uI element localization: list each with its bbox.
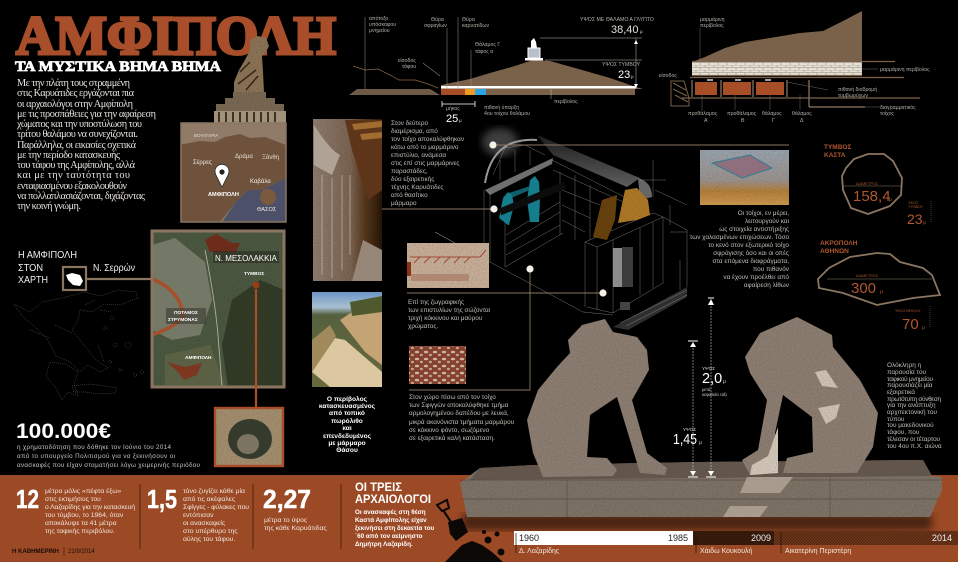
floor text: των Σφιγγών αποκαλύφθηκε τμήμα	[409, 401, 509, 409]
text: sphinx commentary: του 4ου π.Χ. αιώνα	[887, 442, 942, 450]
mosaic text: στα επόμενα διαφράγματα,	[713, 257, 789, 265]
tomb longitudinal section diagram	[659, 11, 930, 124]
section labels: τάφος α	[475, 48, 493, 55]
caryatids text: δύο εξαιρετικής	[391, 175, 434, 183]
section labels: μαρμάρινη περίβολος	[880, 66, 930, 73]
intro text: Παράλληλα, οι εικασίες σχετικά	[17, 140, 137, 151]
locator label: ΣΤΟΝ	[18, 263, 43, 274]
section labels: Θύρα	[462, 17, 475, 23]
stat: 1,5 tons: οι ανασκαφείς	[183, 519, 226, 527]
section labels: Β	[741, 118, 745, 124]
comparison: Kasta tumulus: ΔΙΑΜΕΤΡΟΣ	[856, 182, 879, 186]
comparison: Kasta tumulus: 23	[907, 211, 923, 227]
stat: 1,5 tons: 1,5	[147, 484, 177, 514]
bottom band	[0, 475, 958, 562]
caryatids text: κάτω από το μαρμάρινο	[391, 143, 459, 151]
height marker: sphinx: μ	[699, 440, 702, 446]
text: sphinx commentary: πρωτότυπη σύνθεση	[887, 395, 941, 403]
satellite labels: ΑΜΦΙΠΟΛΗ	[185, 355, 212, 361]
section labels: Α	[704, 118, 708, 124]
satellite labels: ΣΤΡΥΜΟΝΑΣ	[168, 317, 198, 323]
section labels	[369, 15, 654, 125]
stat: 2,27 metres: 2,27	[263, 484, 311, 514]
locator label: Η ΑΜΦΙΠΟΛΗ	[18, 250, 77, 261]
stat: 100.000 euro: η χρηματοδότηση που δόθηκε τον Ιούνιο του 2014	[17, 443, 171, 451]
caryatids text: επιστύλιο, ανάμεσα	[391, 151, 446, 159]
height marker: sphinx: 2,0	[702, 371, 722, 387]
comparison: Acropolis: 300	[851, 280, 876, 297]
enclosure caption: και	[342, 425, 352, 432]
intro text: στις Καρυάτιδες εργάζονται πια	[17, 88, 135, 99]
stat: 100.000 euro: ανασκαφές που είχαν σταματήσει λόγω χειμερινής περιόδου	[17, 461, 201, 469]
caryatids text: Στον δεύτερο	[391, 119, 429, 127]
intro text: με τις προσπάθειες για την αφαίρεση	[17, 109, 156, 120]
section labels: τάφου	[402, 63, 416, 70]
comparison: Kasta tumulus: ΥΨΟΣ	[908, 201, 919, 205]
fresco text	[408, 298, 491, 330]
stat: 2,27 metres	[263, 484, 327, 532]
intro text: και με την ταυτότητα του	[17, 170, 130, 181]
timeline: 1985	[668, 533, 688, 543]
text: sphinx commentary: του μακεδονικού	[887, 421, 934, 429]
heading: the three archaeologists: Δημήτρη Λαζαρίδη.	[355, 541, 413, 548]
caryatids text: τον τοίχο αποκαλύφθηκαν	[391, 135, 464, 143]
floor text: σε εξαιρετικά καλή κατάσταση.	[409, 434, 495, 442]
comparison: Kasta tumulus: ΤΥΜΒΟΣ	[824, 144, 851, 151]
photo: floor detail	[409, 346, 466, 384]
stat: 12 metres: μέτρα μόλις «πέφτα έξω»	[45, 487, 122, 495]
section labels: μ	[459, 118, 462, 123]
floor text	[409, 393, 515, 442]
enclosure caption: Ο περίβολος	[327, 395, 368, 403]
mosaic text: λειτουργούν και	[745, 217, 790, 225]
floor text: σε κόκκινο φόντο, σωζόμενο	[409, 426, 490, 434]
section labels: προθάλαμος	[688, 110, 718, 117]
stat: 2,27 metres: της κάθε Καρυάτιδας	[264, 524, 327, 532]
section labels: καρυατίδων	[462, 23, 489, 29]
floor text: Στον χώρο πίσω από τον τοίχο	[409, 393, 496, 401]
height marker: sphinx	[673, 298, 727, 477]
tomb wireframe reconstruction	[482, 128, 687, 330]
caryatids text: στις επί στις μαρμάρινες	[391, 159, 460, 167]
section labels: πιθανή διαδρομή	[838, 86, 877, 93]
text: sphinx commentary: παρουσιάζει μία	[887, 381, 933, 389]
leader lines	[365, 17, 471, 89]
section labels: Δ	[800, 118, 804, 124]
section labels: υπόσκαφου	[369, 21, 396, 28]
section labels: τυμβωρύχων	[838, 93, 868, 99]
comparison: Acropolis: ΑΚΡΟΠΟΛΗ	[820, 240, 858, 247]
photo: tomb aerial view	[215, 289, 283, 466]
heading: the three archaeologists: Καστά Αμφίπολης είχαν	[355, 516, 427, 524]
section labels: σφραγίων	[424, 23, 447, 29]
map: location of Amphipolis	[181, 123, 286, 222]
comparison: Kasta tumulus: μ	[889, 197, 892, 203]
mosaic text: αφαίρεση λίθων	[744, 281, 789, 289]
comparison: Kasta tumulus: ΚΑΣΤΑ	[824, 152, 846, 159]
sphinx base	[460, 460, 942, 530]
comparison: Kasta tumulus	[824, 144, 931, 227]
photo: Caryatid	[313, 119, 382, 281]
stat: 12 metres	[16, 484, 135, 535]
stat: 12 metres: ο Λαζαρίδης για την κατασκευή	[45, 503, 135, 511]
intro text: χώματος και την υποστύλωση του	[16, 119, 142, 130]
stat: 12 metres: της ταφικής περιβόλου.	[45, 527, 115, 535]
section labels: τοίχος	[880, 111, 894, 117]
section labels	[659, 16, 930, 124]
footer credit: 22/9/2014	[68, 549, 95, 555]
text: sphinx commentary: ταφικού μνημείου	[887, 375, 934, 383]
comparison: Acropolis: ΔΙΑΜΕΤΡΟΣ	[856, 274, 879, 278]
mosaic text: των χαλασμένων επιχώσεων. Τόσο	[690, 233, 789, 241]
text: sphinx commentary: για την ανάπτυξη	[887, 401, 936, 409]
stat: 1,5 tons: εντόπισαν	[183, 511, 214, 519]
intro text: τρίτου θαλάμου να συνεχίζονται.	[17, 129, 138, 140]
timeline: 1960	[519, 533, 539, 543]
map labels: Καβάλα	[250, 178, 271, 185]
locator label: ΧΑΡΤΗ	[18, 275, 48, 286]
floor text: μικρά ακανόνιστα τμήματα μαρμάρου	[409, 418, 515, 426]
height marker: sphinx: μ	[723, 379, 726, 385]
map labels: Δράμα	[235, 153, 253, 160]
timeline: Δ. Λαζαρίδης	[519, 547, 560, 555]
mosaic text: να έχουν προέλθει από	[723, 273, 789, 281]
section labels: μαρμάρινη	[700, 16, 725, 23]
mosaic text	[690, 209, 790, 289]
caryatids text: από θασίτικο	[391, 191, 428, 199]
map labels	[193, 133, 279, 213]
section labels: Θύρα	[431, 17, 444, 23]
photo: marble enclosure wall	[312, 292, 382, 387]
section labels: Θάλαμος Γ	[475, 41, 500, 48]
locator box: Serres prefecture	[63, 267, 153, 290]
enclosure caption: με μάρμαρο	[328, 440, 366, 447]
right sphinx	[742, 317, 878, 475]
locator label	[18, 250, 77, 286]
section labels: περίβολος	[554, 99, 578, 105]
stat: 1,5 tons: αύλης του τάφου.	[183, 535, 235, 543]
timeline: 2014	[932, 533, 952, 543]
section labels: θάλαμος	[792, 110, 812, 117]
comparison: Acropolis: μ	[922, 325, 925, 331]
comparison: Acropolis: ΥΨΟΣ ΒΡΑΧΟΥ	[895, 309, 921, 313]
icon: monument on mound	[525, 38, 543, 60]
photo: mosaic	[700, 150, 789, 205]
photo: fresco	[407, 243, 489, 288]
stat: 100.000 euro	[16, 419, 201, 469]
map labels: ΑΜΦΙΠΟΛΗ	[208, 192, 239, 198]
height marker: sphinx: κεφαλαίο ταξι	[702, 392, 727, 397]
caryatids text: μάρμαρο	[391, 199, 417, 207]
gold sphinxes	[593, 188, 650, 240]
stat: 1,5 tons	[140, 484, 341, 549]
intro text: ενταφιασμένου εξακολουθούν	[17, 181, 127, 192]
section labels: ΥΨΟΣ ΜΕ ΘΑΛΑΜΟ Α ΓΛΥΠΤΟ	[580, 17, 654, 23]
section labels: μ	[631, 74, 634, 79]
intro text: του τάφου της Αμφίπολης, αλλά	[17, 160, 136, 171]
height marker: sphinx: ΥΨΟΣ	[702, 366, 715, 371]
footer credit	[12, 547, 95, 556]
enclosure caption: κατασκευασμένος	[319, 403, 376, 410]
footer credit: Η ΚΑΘΗΜΕΡΙΝΗ	[12, 549, 59, 555]
timeline: Αικατερίνη Περιστέρη	[785, 547, 851, 555]
comparison: Kasta tumulus: ΤΥΜΒΟΥ	[908, 205, 924, 209]
stat: 12 metres: του τύμβου, το 1964, όταν	[45, 511, 124, 519]
locator label: Serres: Ν. Σερρών	[93, 262, 135, 274]
heading: the three archaeologists	[355, 482, 435, 548]
left sphinx	[527, 319, 667, 477]
icon: map pin	[215, 164, 229, 187]
stat: 12 metres: στις εκτιμήσεις του	[45, 496, 101, 503]
comparison: Kasta tumulus: μ	[923, 220, 926, 226]
section labels: 25	[446, 113, 458, 125]
section labels: απότοξο	[369, 15, 388, 22]
comparison: Acropolis	[818, 240, 940, 333]
mosaic text: ως στοιχεία αντιστήριξης	[719, 225, 789, 233]
caryatids text	[391, 119, 464, 207]
stat: 1,5 tons: Σφίγγες - φύλακες που	[183, 503, 249, 511]
caryatids text: τέχνης Καρυάτιδες	[391, 183, 443, 191]
caryatids text: διαμέρισμα, από	[391, 127, 438, 135]
heading: the three archaeologists: ΑΡΧΑΙΟΛΟΓΟΙ	[355, 494, 431, 506]
height marker: sphinx: ΥΨΟΣ	[683, 427, 696, 432]
text: sphinx commentary: τύπου	[887, 415, 905, 423]
section labels: θάλαμος	[762, 110, 782, 117]
fresco text: των επιστυλίων της σώζονται	[408, 306, 491, 314]
timeline: Χάιδω Κουκουλή	[700, 547, 753, 555]
map labels: Σέρρες	[193, 159, 212, 166]
satellite labels: Ν. ΜΕΣΟΛΑΚΚΙΑ	[215, 253, 277, 263]
title: ΑΜΦΙΠΟΛΗ	[16, 5, 336, 66]
intro text: την κοινή γνώμη.	[17, 201, 81, 212]
mosaic text: Οι τοίχοι, εν μέρει,	[738, 209, 789, 217]
intro text: να πολλαπλασιάζονται, διχάζοντας	[17, 191, 145, 202]
timeline: 2009	[751, 533, 771, 543]
text: sphinx commentary: τέλεσαν οι τέταρτου	[887, 435, 940, 443]
map labels: ΘΑΣΟΣ	[257, 207, 277, 213]
enclosure caption	[319, 395, 376, 454]
mosaic text: το κενό στον εξωτερικό τοίχο	[708, 241, 789, 249]
comparison: Kasta tumulus: 158,4	[853, 188, 891, 205]
stat: 1,5 tons: τόνο ζυγίζει κάθε μία	[183, 487, 245, 495]
heading: the three archaeologists: ξεκινήσει στη δεκαετία του	[355, 525, 435, 532]
comparison: Acropolis: 70	[902, 316, 919, 333]
vault roof band	[537, 135, 640, 187]
satellite labels: ΠΟΤΑΜΟΣ	[174, 310, 198, 316]
teal caryatids	[499, 176, 540, 225]
intro text: οι αρχαιολόγοι στην Αμφίπολη	[17, 99, 133, 110]
height marker: sphinx: 1,45	[673, 432, 697, 448]
section labels: περίβολος	[700, 23, 724, 29]
section labels: μνημείου	[369, 28, 390, 34]
satellite labels: ΤΥΜΒΟΣ	[244, 271, 264, 277]
text: sphinx commentary: Ολόκληρη η	[887, 361, 922, 369]
section labels: μ	[640, 29, 643, 34]
fresco text: τριχή κόκκινου και μαύρου	[408, 314, 483, 322]
intro text: με την περίοδο κατασκευής	[17, 150, 120, 161]
map labels: ΒΟΥΛΓΑΡΙΑ	[194, 133, 218, 138]
height marker: sphinx: μετά	[702, 387, 711, 392]
section labels: ΥΨΟΣ ΤΥΜΒΟΥ	[602, 62, 641, 68]
icon: shovel and soil	[437, 500, 504, 562]
callout markers and leader lines	[382, 141, 789, 390]
enclosure caption: πωρόλιθο	[331, 417, 363, 425]
timeline	[514, 531, 958, 555]
section labels: μήκος	[446, 105, 460, 112]
enclosure caption: από τοπικό	[329, 410, 365, 417]
caryatids text: παραστάδες,	[391, 167, 428, 175]
subtitle: ΤΑ ΜΥΣΤΙΚΑ ΒΗΜΑ ΒΗΜΑ	[15, 59, 221, 75]
satellite labels	[166, 251, 279, 361]
stat: 1,5 tons: από τις ακέφαλες	[183, 495, 236, 503]
heading: the three archaeologists: ΟΙ ΤΡΕΙΣ	[355, 482, 402, 494]
floor text: αρμολογημένου δαπέδου με λευκά,	[409, 409, 509, 417]
stat: 100.000 euro: από το υπουργείο Πολιτισμού για να ξεκινήσουν οι	[17, 452, 176, 460]
satellite map	[152, 231, 284, 387]
section labels: 23	[618, 69, 630, 81]
section labels: πιθανή ύπαρξη	[484, 104, 519, 111]
icon: lion statue	[214, 36, 286, 123]
text: sphinx commentary: παρουσία του	[887, 368, 927, 376]
comparison: Acropolis: μ	[880, 289, 883, 295]
map of Greece	[14, 290, 144, 400]
intro text	[16, 78, 156, 212]
section labels: είσοδος	[659, 73, 677, 79]
text: sphinx commentary: αρχιτεκτονική του	[887, 409, 938, 416]
text: sphinx commentary	[887, 361, 942, 450]
stat: 1,5 tons: στο υπέρθυρο της	[183, 527, 238, 535]
section labels: είσοδος	[398, 58, 416, 64]
tumulus cross-section diagram	[349, 15, 654, 125]
text: sphinx commentary: εξαιρετικά	[887, 388, 915, 396]
heading: the three archaeologists: ΄60 από τον αείμνηστο	[355, 533, 423, 540]
fresco text: Επί της ζωγραφικής	[408, 298, 464, 306]
stat: 2,27 metres: μέτρα το ύψος	[264, 516, 308, 524]
section labels: διαγραμματικός	[880, 104, 916, 111]
stat: 100.000 euro: 100.000€	[16, 419, 111, 443]
section labels: 38,40	[611, 24, 639, 36]
comparison: Acropolis: ΑΘΗΝΩΝ	[820, 248, 849, 255]
stat: 12 metres: 12	[16, 484, 39, 514]
stat: 12 metres: αποκάλυψε τα 41 μέτρα	[45, 519, 117, 527]
enclosure caption: επενδεδυμένος	[323, 433, 372, 440]
map labels: Ξάνθη	[262, 154, 279, 161]
enclosure caption: Θάσου	[336, 447, 358, 454]
mosaic text: που πιθανόν	[753, 265, 789, 273]
mosaic text: σφράγισης όσο και οι οπές	[713, 249, 789, 257]
heading: the three archaeologists: Οι ανασκαφές στη θέση	[355, 509, 426, 516]
intro text: Με την πλάτη τους στραμμένη	[17, 78, 130, 89]
fresco text: χρώματος.	[408, 322, 438, 330]
text: sphinx commentary: τάφου, που	[887, 428, 920, 436]
section labels: 4ου τοίχου θαλάμου	[484, 110, 530, 117]
section labels: προθάλαμος	[727, 110, 757, 117]
section labels: Γ	[772, 118, 775, 124]
